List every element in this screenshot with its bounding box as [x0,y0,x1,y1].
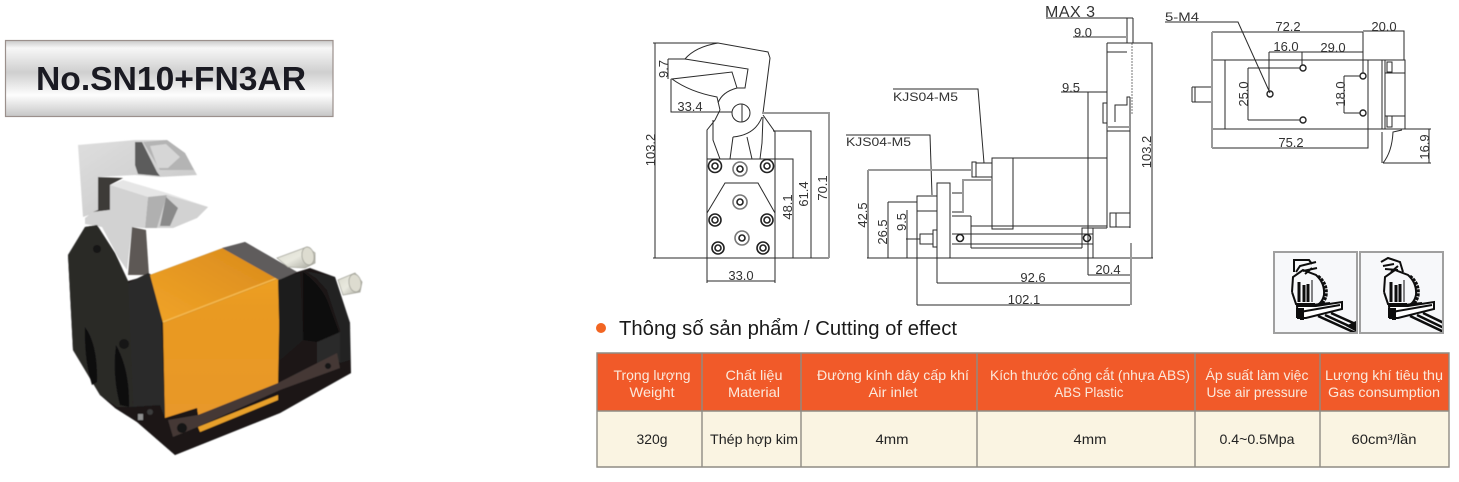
table header row: Chất liệu [726,367,782,383]
dimension labels: 103.2 [1139,136,1154,168]
dimension labels: 42.5 [855,202,870,228]
mounting block [707,159,775,258]
rear black housing [278,271,350,372]
side slots [85,245,129,407]
table header row [597,353,1449,411]
mounting holes [1267,65,1366,123]
dimension labels: MAX 3 [1045,4,1095,21]
dimension labels: 9.5 [1062,80,1080,95]
dimension labels: 33.0 [728,268,754,283]
black body silhouette [68,225,351,455]
dimension labels: 26.5 [875,219,890,245]
dimension labels: 5-M4 [1165,12,1200,24]
dimension labels: 92.6 [1020,270,1046,285]
dimension labels: 29.0 [1320,40,1346,55]
small screws [138,409,153,420]
dimension labels: 16.0 [1273,39,1299,54]
title badge: No.SN10+FN3AR [36,60,306,97]
screws [956,234,1090,242]
table header row: Air inlet [868,384,918,400]
dark strap [168,353,340,437]
body outline [1192,60,1405,163]
table header row: ABS Plastic [1054,384,1124,400]
dimension labels: 48.1 [780,194,795,220]
technical drawing: front view [643,43,830,283]
dimension labels: 9.7 [656,60,671,78]
title badge [6,40,333,116]
technical drawing: top view [1165,12,1432,163]
front black frame [128,273,165,420]
table header row: Use air pressure [1206,384,1308,400]
dimension labels: KJS04-M5 [846,137,911,149]
pivot pin [732,104,750,122]
table header row: Kích thước cổng cắt (nhựa ABS) [990,367,1190,383]
dimension labels: 25.0 [1236,81,1251,107]
dimension labels: 103.2 [643,134,658,166]
leader lines and dimensions [846,18,1153,305]
product photo: pneumatic cutter [68,140,362,455]
dimension labels: 72.2 [1275,19,1301,34]
table value row: 60cm³/lần [1352,431,1416,447]
orange body top [150,248,280,323]
table value row [597,411,1449,467]
table value row: 4mm [876,431,908,447]
dimension labels: 20.4 [1095,262,1121,277]
body outline [917,18,1130,258]
bolts [708,160,774,254]
dimension labels: 70.1 [815,175,830,201]
orange body front [163,278,280,418]
table header row: Gas consumption [1328,384,1440,400]
table header row: Áp suất làm việc [1206,367,1308,383]
thumbnail: gripper position 2 [1360,252,1446,333]
lower blade [93,177,208,228]
blade shank [85,185,148,270]
dimension labels: 75.2 [1278,135,1304,150]
technical drawing: side view [846,4,1154,307]
dimension labels [846,4,1154,307]
dimension lines [653,43,829,283]
section heading: Thông số sản phẩm / Cutting of effect [619,318,957,340]
dimension labels: 20.0 [1371,19,1397,34]
dimension labels: 9.0 [1074,25,1092,40]
table value row: 320g [636,431,668,447]
table value row: 0.4~0.5Mpa [1220,431,1295,447]
table header row: Đường kính dây cấp khí [817,367,969,383]
table header row: Lượng khí tiêu thụ [1325,367,1443,383]
lower air fitting [338,273,362,295]
table value row: Thép hợp kim [710,431,798,447]
dimension labels: KJS04-M5 [893,92,958,104]
jaw outline [668,43,775,159]
upper air fitting [277,246,315,268]
black base [115,368,351,455]
dimension labels: 16.9 [1417,134,1432,160]
grey plate [222,242,297,280]
dimension labels: 33.4 [677,99,703,114]
table header row: Weight [630,384,675,400]
left black face [68,225,133,407]
upper blade [78,140,197,217]
specification table [597,353,1449,467]
thumbnail: gripper position 1 [1274,252,1360,335]
dimension labels: 102.1 [1008,292,1040,307]
dimension lines [1165,22,1431,163]
table header row: Trọng lượng [614,367,690,383]
dimension labels: 18.0 [1333,81,1348,107]
dimension labels [1165,12,1432,160]
dimension labels: 61.4 [796,181,811,207]
table value row: 4mm [1074,431,1106,447]
dimension labels: 9.5 [894,213,909,231]
table header row: Material [728,384,780,400]
dimension labels [643,60,830,283]
